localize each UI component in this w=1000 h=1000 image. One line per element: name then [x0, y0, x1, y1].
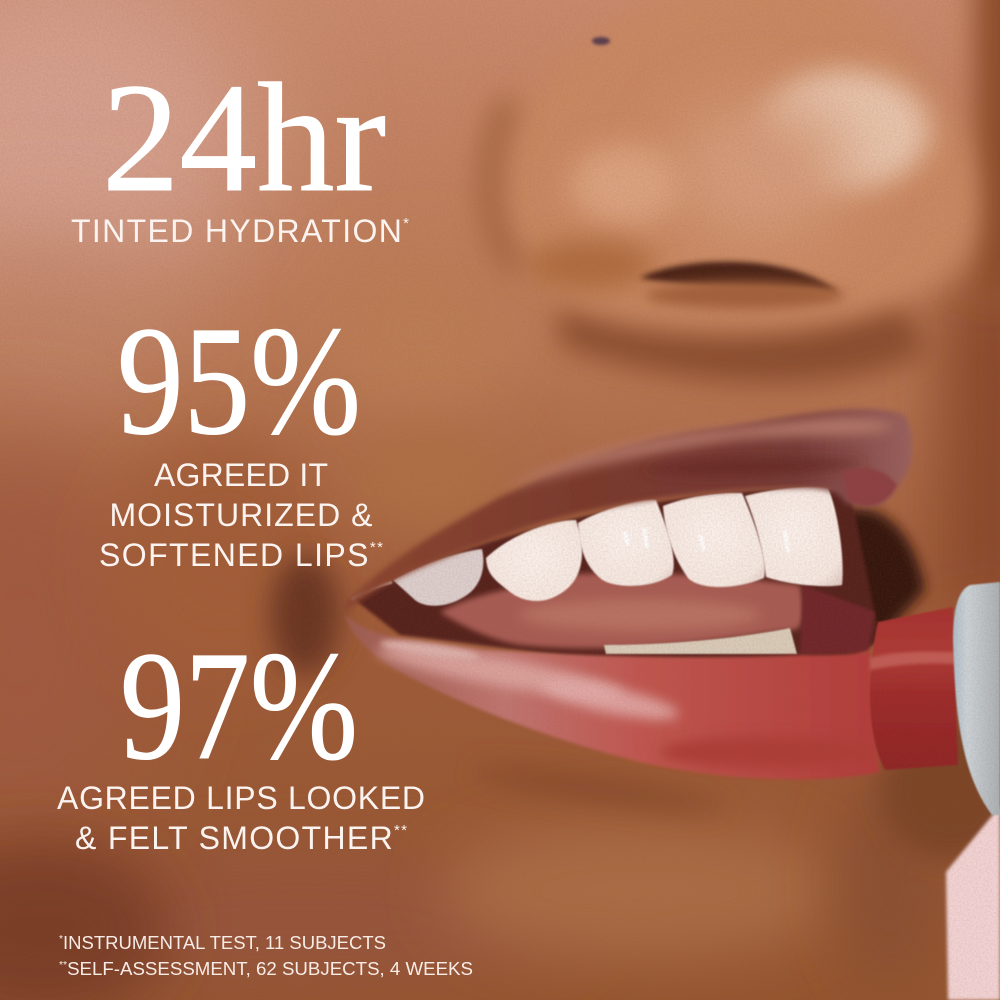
- stat: 95%: [99, 294, 383, 573]
- tongue: [440, 573, 875, 654]
- mouth interior: [355, 489, 880, 660]
- upper lip: [345, 409, 912, 612]
- shadow below nose: [560, 300, 930, 383]
- heading: 24hr: 24hr: [102, 51, 386, 224]
- label: tinted hydration: *: [403, 215, 409, 232]
- lipstick metal tube: [953, 582, 1000, 815]
- cheek shadow near lips: [840, 508, 925, 640]
- heading: 97%: 97%: [120, 619, 358, 792]
- label: agreed it moisturized: [99, 457, 383, 573]
- upper teeth: [393, 487, 843, 606]
- label: agreed it moisturized: AGREED IT: [154, 457, 328, 493]
- lower lip: [345, 615, 880, 779]
- footnotes: [59, 933, 473, 979]
- label: agreed lips looked: & FELT SMOOTHER: [75, 820, 393, 856]
- label: agreed lips looked: **: [394, 822, 407, 839]
- stat: 24hr tinted hydration: [71, 51, 409, 249]
- label: agreed lips looked: [57, 780, 425, 856]
- nose: [490, 0, 975, 383]
- pink backdrop corner: [946, 806, 1000, 1000]
- nose body: [500, 0, 975, 322]
- nostril: [640, 262, 838, 292]
- label: tinted hydration: TINTED HYDRATION: [71, 213, 402, 249]
- label: agreed it moisturized: SOFTENED LIPS: [99, 537, 368, 573]
- footnotes: *: [59, 934, 63, 945]
- stat: 97%: [57, 619, 425, 856]
- label: agreed it moisturized: MOISTURIZED &: [110, 497, 372, 533]
- lipstick bullet: [870, 607, 958, 770]
- footnotes: SELF-ASSESSMENT, 62 SUBJECTS, 4 WEEKS: [67, 959, 473, 979]
- label: agreed lips looked: AGREED LIPS LOOKED: [57, 780, 425, 816]
- label: agreed it moisturized: **: [370, 539, 383, 556]
- footnotes: **: [59, 960, 67, 971]
- mole: [592, 37, 610, 45]
- left crease of nose wing: [490, 100, 518, 270]
- heading: 95%: 95%: [117, 294, 361, 467]
- footnotes: INSTRUMENTAL TEST, 11 SUBJECTS: [63, 933, 386, 953]
- lower teeth: [604, 628, 797, 654]
- corner white line: [352, 582, 392, 600]
